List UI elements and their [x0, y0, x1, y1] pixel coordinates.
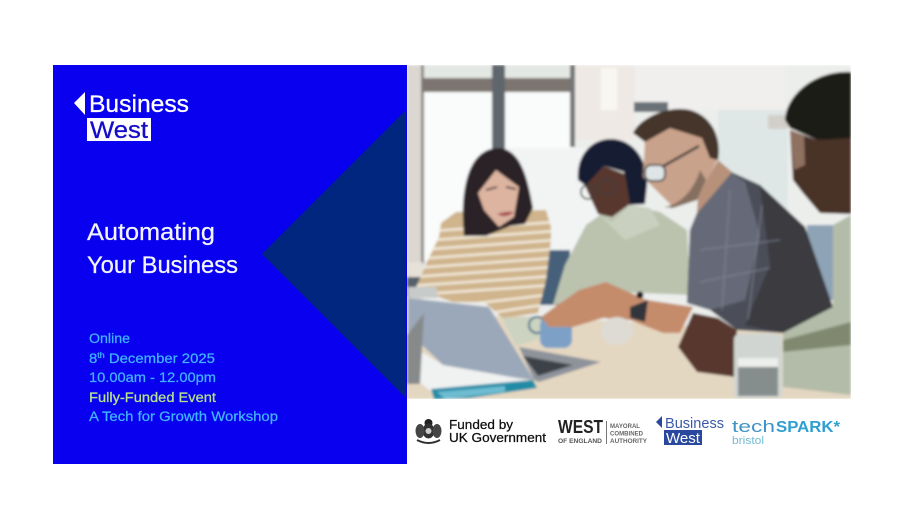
logo: West of England Mayoral Combined Authority: AUTHORITY: [610, 438, 648, 445]
person: woman in striped sweater: [410, 148, 555, 318]
photo: four colleagues around a laptop: [407, 65, 851, 399]
event details text: A Tech for Growth Workshop: [89, 409, 278, 424]
logo: West of England Mayoral Combined Authority: COMBINED: [610, 430, 643, 438]
logo: techSPARK bristol: SPARK*: [776, 419, 841, 436]
table: [407, 315, 851, 399]
event details text: December 2025: [105, 351, 215, 366]
logo: techSPARK bristol: [732, 417, 841, 447]
title: [87, 219, 238, 279]
event details text: Online: [89, 331, 130, 346]
logo: Business West white: West: [90, 117, 148, 144]
logo: Business West blue: West: [666, 431, 700, 447]
icon: royal coat of arms: [416, 419, 442, 443]
event details text: 10.00am - 12.00pm: [89, 370, 216, 385]
person: woman in sage turtleneck: [553, 139, 690, 305]
logo: Business West white: [74, 91, 189, 144]
logo: Funded by UK Government: UK Government: [449, 430, 546, 445]
logo: West of England Mayoral Combined Authority: [558, 417, 648, 445]
mug: [529, 303, 578, 348]
logo: techSPARK bristol: tech: [732, 417, 775, 436]
logo: techSPARK bristol: bristol: [732, 435, 764, 447]
event details text: 8: [89, 351, 96, 366]
water glass: [734, 334, 782, 398]
logo: West of England Mayoral Combined Authority: WEST: [558, 417, 603, 437]
dark navy triangle: [262, 110, 406, 398]
laptop: [408, 298, 601, 382]
logo: Funded by UK Government: Funded by: [449, 417, 514, 432]
office background: [407, 65, 851, 334]
notebook: [502, 316, 541, 346]
title: Automating: [87, 219, 215, 246]
logo: West of England Mayoral Combined Authority: MAYORAL: [610, 423, 640, 430]
logo strip: [416, 416, 841, 447]
logo: Business West white: Business: [89, 91, 189, 118]
event details text: th: [97, 351, 105, 360]
papers and folder: [414, 350, 537, 399]
person: man with glasses in checked shirt: [633, 109, 833, 333]
logo: West of England Mayoral Combined Authority: OF ENGLAND: [558, 438, 602, 445]
clasped hands: [678, 313, 737, 377]
event details text: Fully-Funded Event: [89, 390, 216, 405]
logo: Business West blue: Business: [665, 416, 724, 432]
title: Your Business: [87, 252, 238, 279]
logo: Funded by UK Government: [416, 417, 546, 445]
bowl: [601, 317, 633, 345]
panel: blue event details: [53, 65, 407, 464]
glass and pen pot at left: [407, 287, 437, 384]
logo: Business West blue: [656, 416, 724, 447]
event details text: [89, 331, 278, 424]
arm and hand of man: [541, 282, 693, 333]
person: man at right edge: [783, 72, 851, 395]
